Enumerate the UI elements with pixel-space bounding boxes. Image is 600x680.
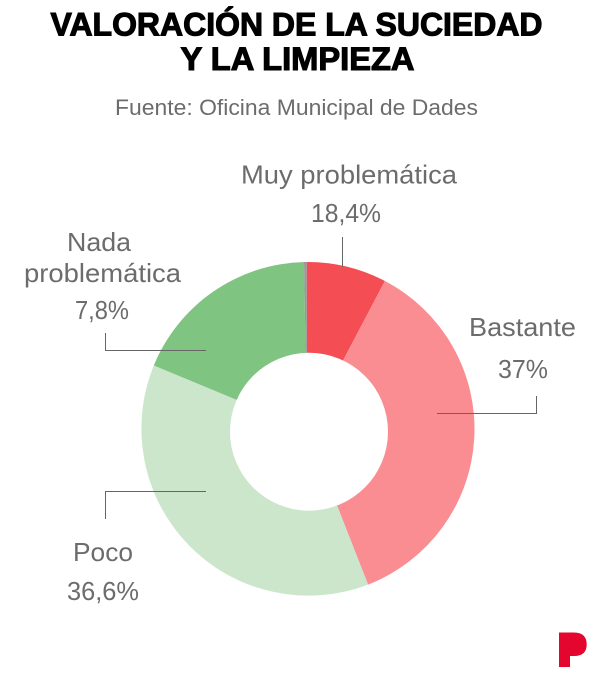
leader line: Bastante — [437, 396, 536, 414]
slice: Bastante — [307, 281, 475, 585]
title — [50, 6, 542, 77]
label: Nada problemática: 7,8% — [75, 295, 129, 325]
label: Bastante: Bastante — [469, 312, 576, 342]
leader line: Muy problemática — [342, 237, 344, 267]
label: Poco: Poco — [73, 537, 133, 567]
label: Bastante — [469, 312, 576, 384]
title: VALORACIÓN DE LA SUCIEDAD — [50, 6, 542, 42]
slice: Nada problemática — [154, 262, 307, 429]
label: Bastante: 37% — [498, 354, 548, 384]
label: Nada problemática: Nada — [67, 227, 132, 257]
donut hole — [230, 353, 388, 511]
leader line: Poco — [106, 492, 206, 519]
title: Y LA LIMPIEZA — [180, 41, 414, 77]
label: Muy problemática: Muy problemática — [241, 160, 458, 190]
subtitle: source: Fuente: Oficina Municipal de Dades — [115, 95, 478, 120]
donut chart — [141, 262, 475, 596]
slice: Poco — [141, 366, 368, 596]
slice: Muy problemática — [307, 262, 385, 429]
slice: no answer sliver — [304, 262, 307, 429]
label: Poco: 36,6% — [67, 576, 139, 606]
label: Muy problemática: 18,4% — [311, 198, 381, 228]
label: Nada problemática: problemática — [24, 258, 182, 288]
label: Muy problemática — [241, 160, 458, 228]
label: Nada problemática — [24, 227, 182, 325]
icon: publisher P logo — [559, 632, 587, 667]
leader line: Nada problemática — [106, 333, 206, 350]
label: Poco — [67, 537, 139, 606]
